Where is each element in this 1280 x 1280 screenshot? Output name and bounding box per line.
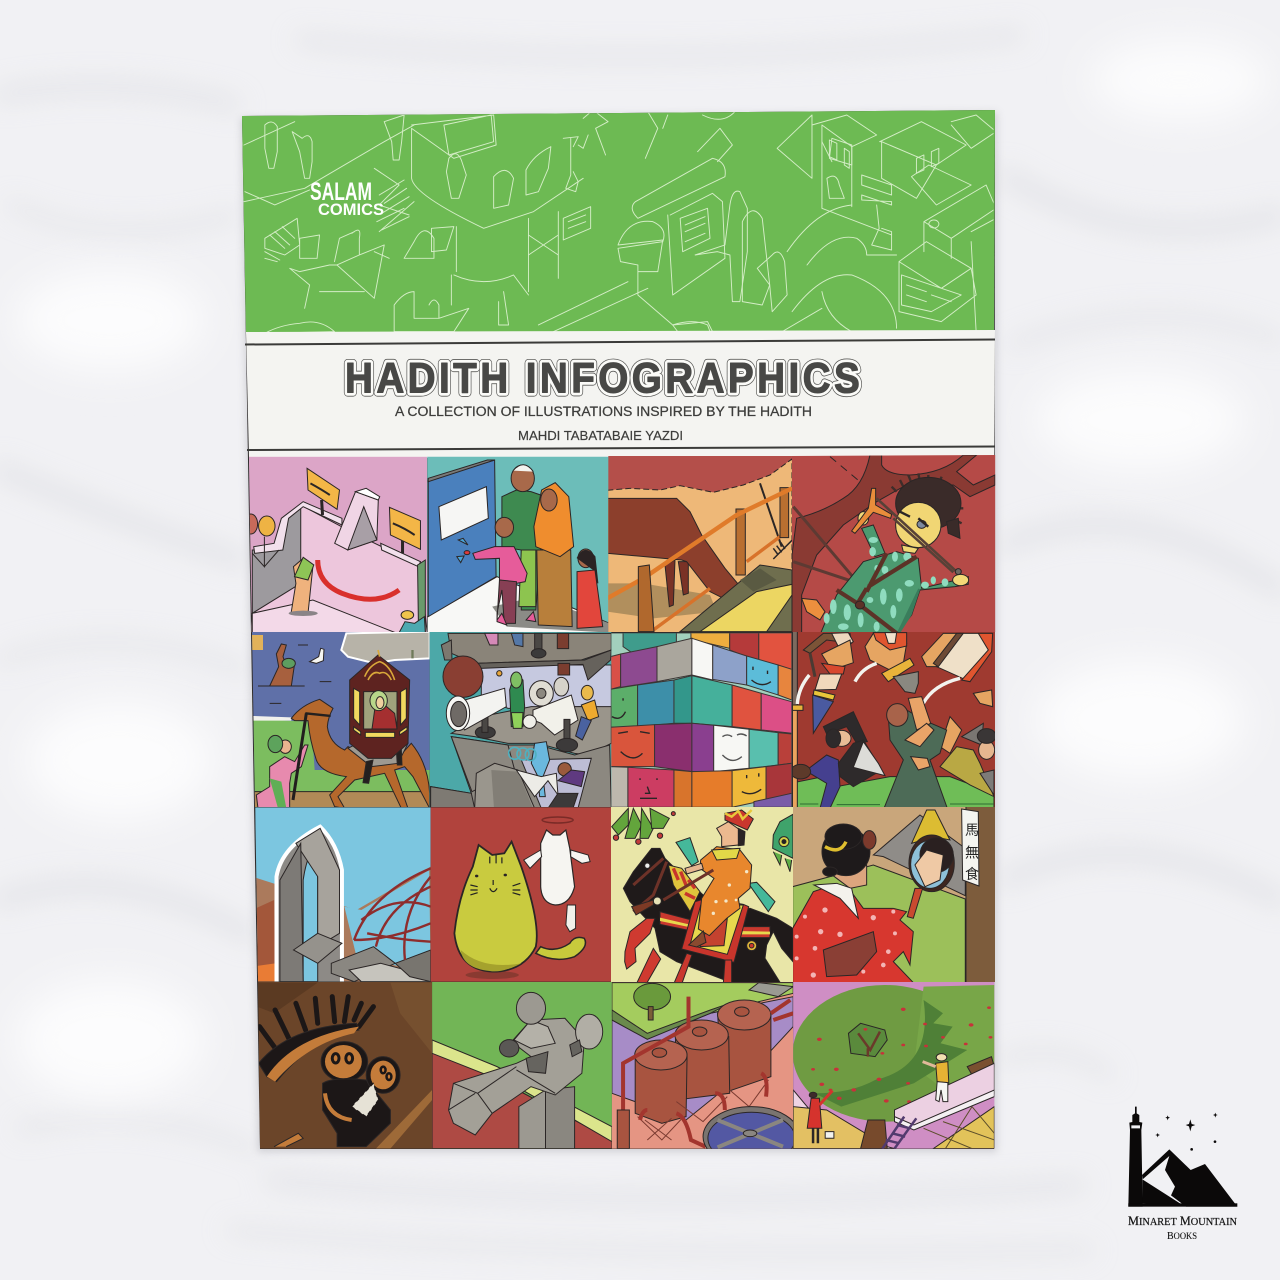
panel: woman in kimono with mirror: 食 — [965, 864, 979, 884]
panel group: collapse cell — [790, 630, 997, 810]
logo: Minaret Mountain Books — [1128, 1107, 1237, 1242]
panel: grey origami robot — [429, 982, 613, 1150]
panel: silos and pipes — [612, 982, 794, 1149]
panel group: rider and kimono cells — [610, 805, 997, 985]
book cover base — [242, 110, 995, 1149]
panel: woman in kimono with mirror — [792, 805, 997, 985]
panel: camel and howdah — [250, 630, 431, 810]
panel: coloured smiling blocks — [609, 633, 793, 808]
logo: Salam Comics: SALAM — [310, 178, 372, 206]
panel: white title band — [245, 330, 995, 458]
title: HADITH INFOGRAPHICS — [345, 354, 860, 402]
sign lettering: 馬 — [965, 820, 979, 840]
panel: figure with slingshot — [790, 453, 998, 633]
panel: fruit tree and picker — [792, 982, 996, 1150]
panel: illustration grid, first two row cells in wide frame — [244, 457, 793, 808]
logo: Salam Comics — [310, 178, 384, 219]
icon: minaret tower — [1128, 1107, 1143, 1207]
icon: mountains — [1142, 1149, 1237, 1207]
icon: stars — [1155, 1113, 1218, 1151]
panel: telescope machinery — [428, 630, 613, 810]
logo: Salam Comics: COMICS — [318, 200, 384, 219]
panel: ribbon cutting at exhibition — [244, 457, 429, 633]
panel: horse at trough — [607, 455, 794, 633]
panel: green header band with line art — [242, 110, 996, 334]
author: MAHDI TABATABAIE YAZDI — [518, 428, 683, 443]
label: Minaret Mountain: MINARET MOUNTAIN — [1128, 1214, 1237, 1228]
label: Books: BOOKS — [1167, 1230, 1197, 1242]
panel group: horse and slingshot cells — [607, 453, 998, 633]
panel group: row three and four cells — [252, 807, 996, 1167]
panel: tribal mask figure — [255, 982, 434, 1150]
title: HADITH INFOGRAPHICS — [345, 354, 860, 402]
panel: arch and dome — [252, 807, 433, 983]
panel: collapsing bricks and fallen people — [790, 630, 997, 810]
panel: Mughal rider on horse — [610, 805, 795, 985]
panel group: camel and telescope cells — [250, 630, 613, 810]
panel: family at the door — [424, 457, 613, 633]
title: HADITH INFOGRAPHICS — [345, 354, 860, 402]
subtitle: A COLLECTION OF ILLUSTRATIONS INSPIRED BY THE HADITH — [395, 404, 812, 419]
panel: yellow cat and white angel cat — [429, 807, 613, 983]
book shadow — [241, 112, 997, 1152]
panel: woman in kimono with mirror: 無 — [965, 843, 979, 863]
